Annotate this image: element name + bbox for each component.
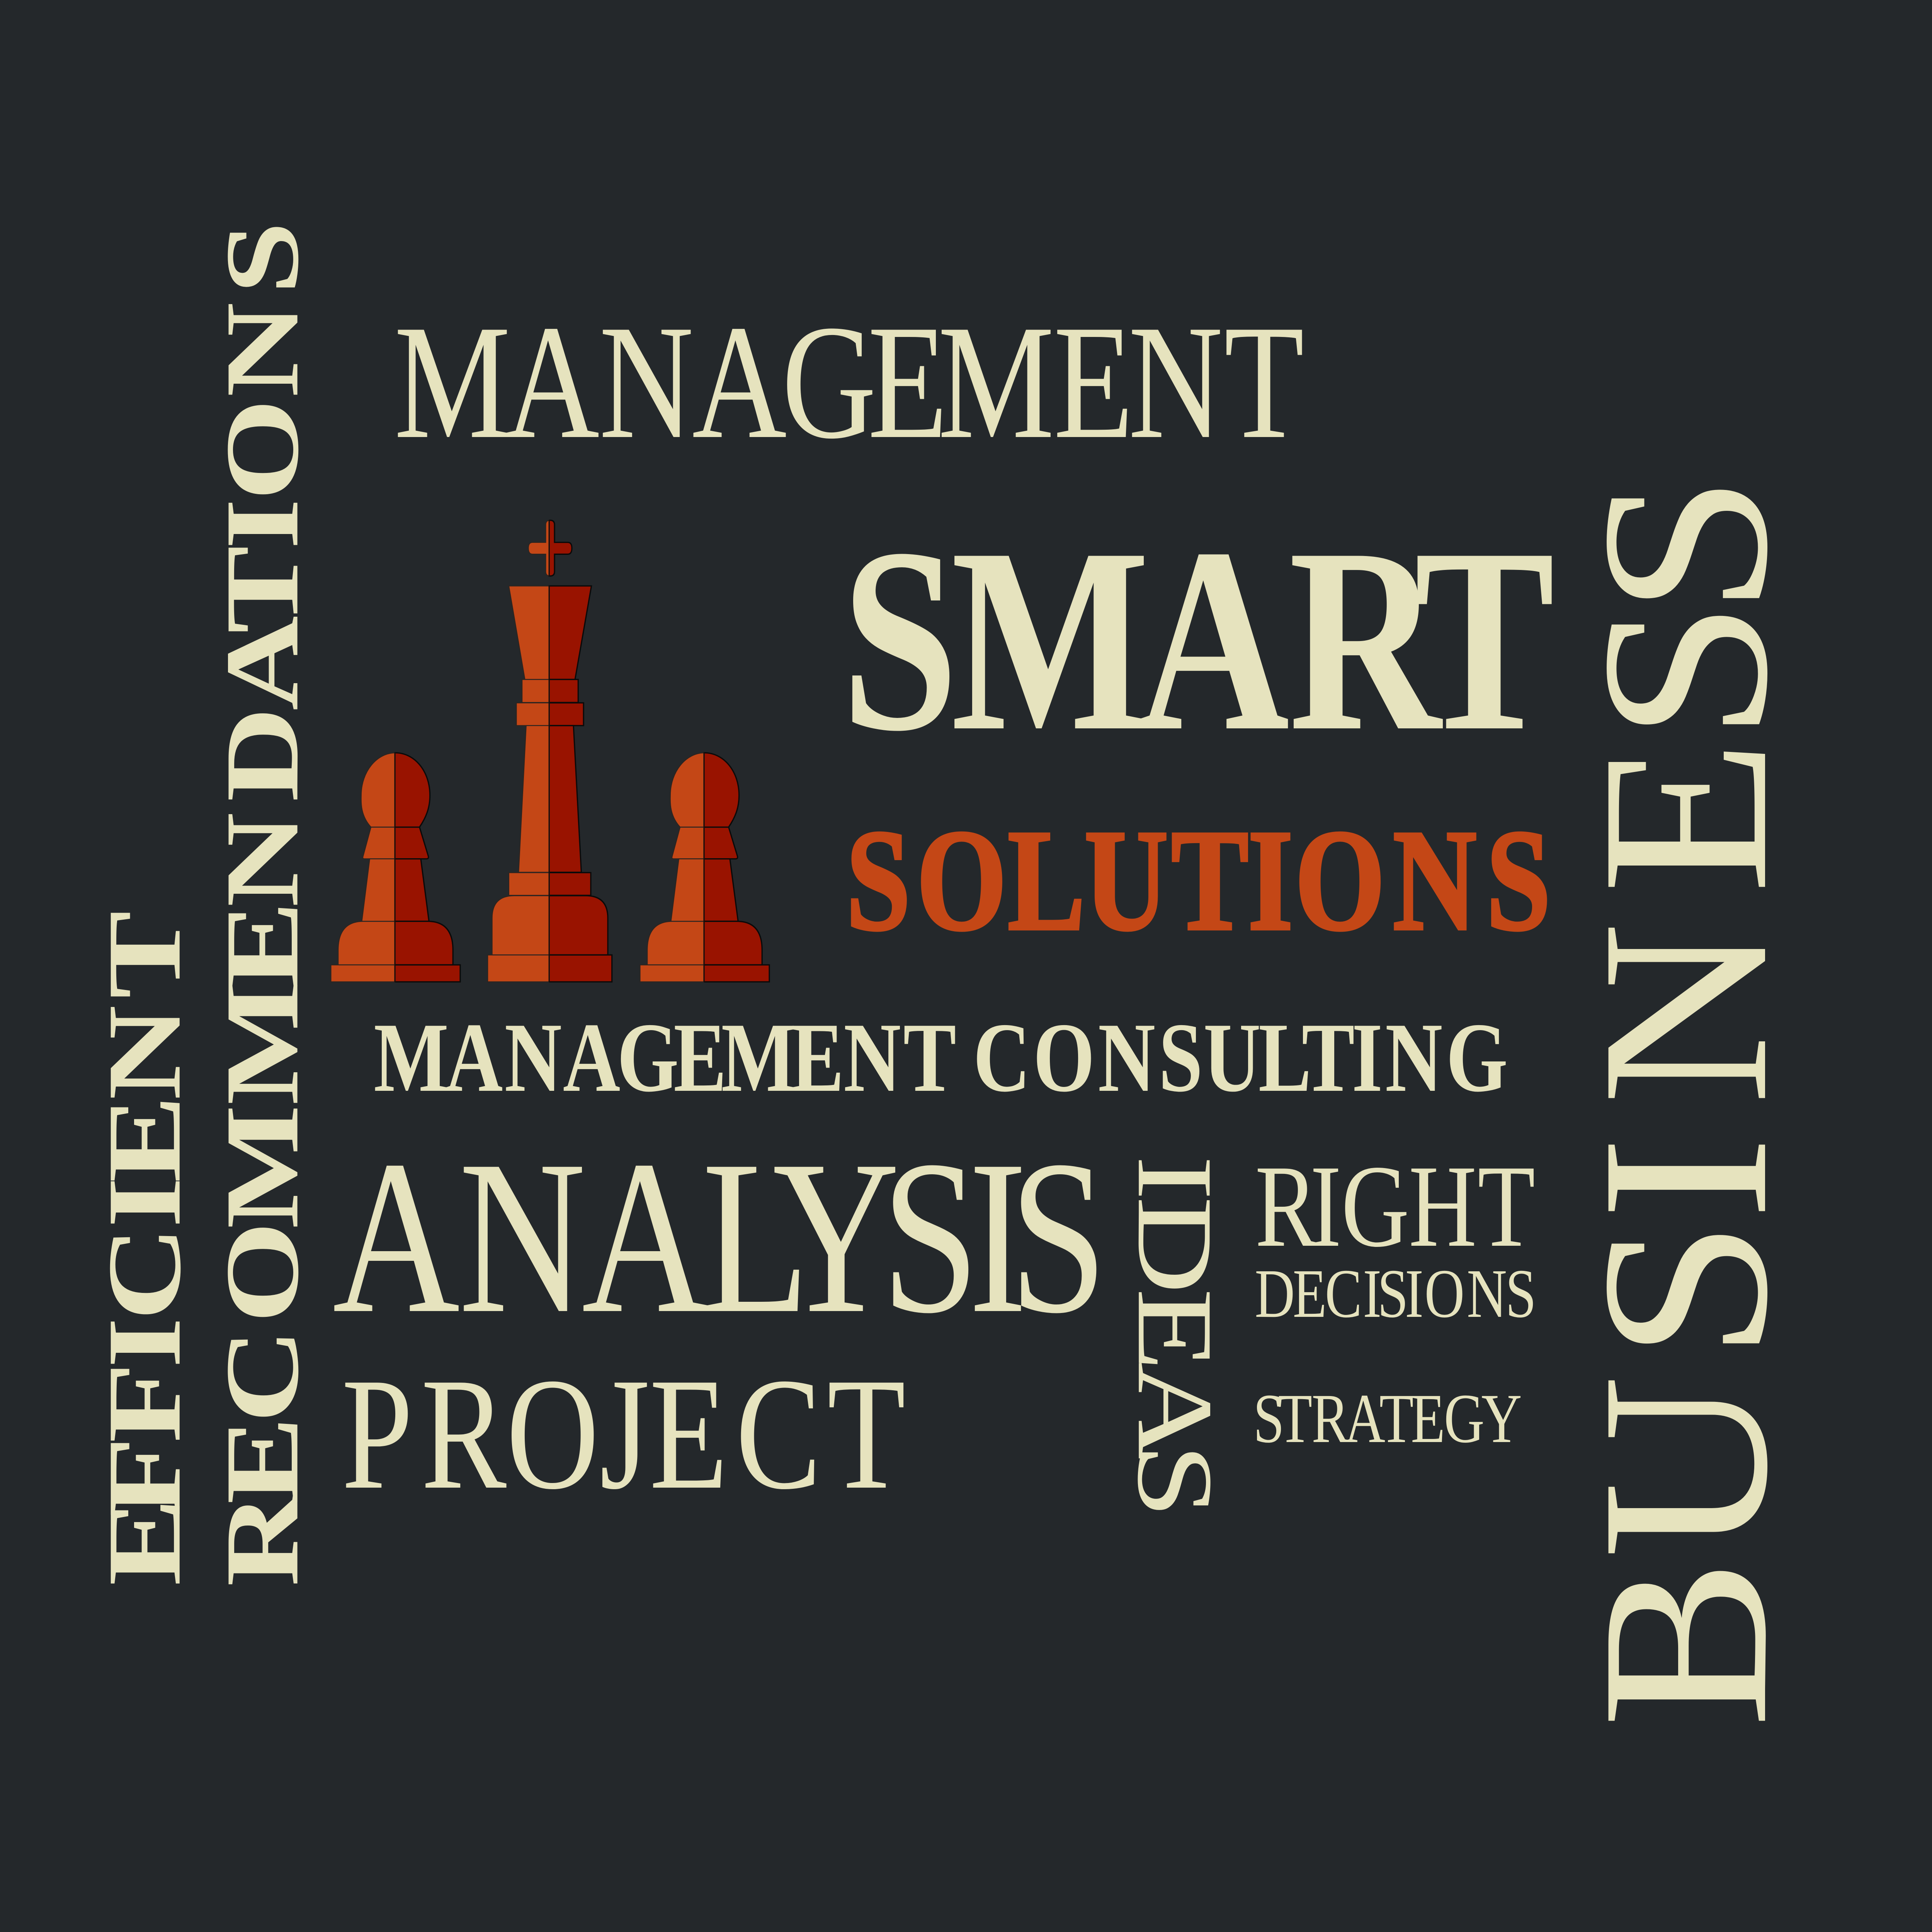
- word cloud infographic: [110, 227, 1767, 1721]
- icon: chess pieces: [331, 520, 769, 982]
- word: PROJECT: PROJECT: [342, 1345, 906, 1523]
- word: DECISIONS: DECISIONS: [1255, 1255, 1536, 1332]
- word: RECOMMENDATIONS (rotated): RECOMMENDATIONS: [204, 221, 320, 1587]
- word: RIGHT: RIGHT: [1255, 1141, 1535, 1271]
- icon: left pawn: [331, 752, 460, 982]
- word: SMART: SMART: [841, 494, 1555, 786]
- word: STRATEGY: STRATEGY: [1253, 1379, 1522, 1458]
- word: EFFICIENT (rotated): EFFICIENT: [86, 911, 202, 1586]
- icon: right pawn: [640, 752, 769, 982]
- word: MANAGEMENT: MANAGEMENT: [394, 291, 1304, 473]
- word: ANALYSIS: ANALYSIS: [333, 1115, 1107, 1359]
- word: SOLUTIONS: SOLUTIONS: [846, 800, 1551, 961]
- word: IDEAS (rotated): IDEAS: [1115, 1155, 1235, 1519]
- word: BUSINESS (rotated): BUSINESS: [1552, 474, 1817, 1728]
- icon: king: [488, 520, 612, 982]
- word: MANAGEMENT CONSULTING: MANAGEMENT CONSULTING: [374, 1003, 1508, 1112]
